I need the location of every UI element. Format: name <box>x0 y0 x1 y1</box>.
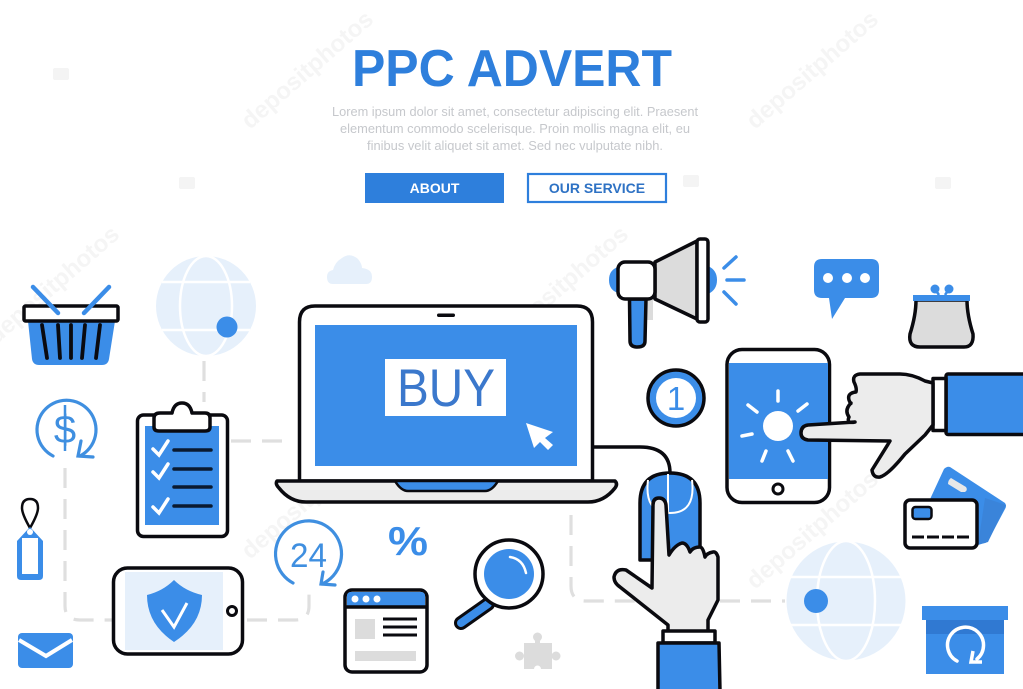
icon: cloud <box>327 255 372 284</box>
icon: number one coin <box>648 370 704 426</box>
icon: box with refresh arrow <box>922 606 1008 674</box>
button: about: ABOUT <box>410 180 460 196</box>
button: our service: OUR SERVICE <box>549 180 645 196</box>
icon: dollar refresh <box>37 400 96 457</box>
text: depositphotos <box>491 221 634 350</box>
laptop with buy screen: BUY <box>397 359 495 418</box>
mouse with clicking hand <box>614 473 720 689</box>
icon: speech bubble <box>814 259 879 319</box>
icon: globe top <box>156 256 256 356</box>
icon: credit cards <box>905 467 1006 548</box>
intro text block: finibus velit aliquet sit amet. Sed nec vulputate nibh. <box>367 139 663 153</box>
hand pointing at phone <box>801 374 1023 477</box>
text: depositphotos <box>741 6 884 135</box>
icon: megaphone <box>609 239 744 347</box>
text: depositphotos <box>741 466 884 595</box>
icon: percent: % <box>388 518 428 564</box>
button: our service <box>528 174 666 202</box>
icon: number one coin: 1 <box>667 380 685 417</box>
icon: puzzle piece <box>515 632 560 672</box>
icon: clipboard checklist <box>138 403 228 536</box>
icon: dollar refresh: $ <box>54 408 76 452</box>
intro text block <box>332 105 699 153</box>
icon: price tag <box>17 499 43 580</box>
icon: purse <box>910 284 973 347</box>
icon: shopping basket <box>24 287 118 365</box>
icon: browser window <box>345 590 427 672</box>
cable from laptop to mouse <box>593 447 670 473</box>
text: depositphotos <box>236 6 379 135</box>
icon: 24 hours <box>276 521 342 585</box>
icon: globe bottom <box>786 541 906 661</box>
intro text block: Lorem ipsum dolor sit amet, consectetur adipiscing elit. Praesent <box>332 105 699 119</box>
intro text block: elementum commodo scelerisque. Proin mollis magna elit, eu <box>340 122 690 136</box>
dashed connectors <box>65 361 785 620</box>
icon: 24 hours: 24 <box>290 537 327 575</box>
button: about <box>365 173 504 203</box>
icon: magnifier <box>461 540 543 623</box>
icon: envelope <box>18 633 73 668</box>
laptop with buy screen <box>276 306 616 502</box>
icon: smartphone with sun <box>727 350 830 502</box>
title: PPC ADVERT <box>352 40 672 98</box>
text: depositphotos <box>236 436 379 565</box>
icon: phone with shield <box>114 568 242 654</box>
